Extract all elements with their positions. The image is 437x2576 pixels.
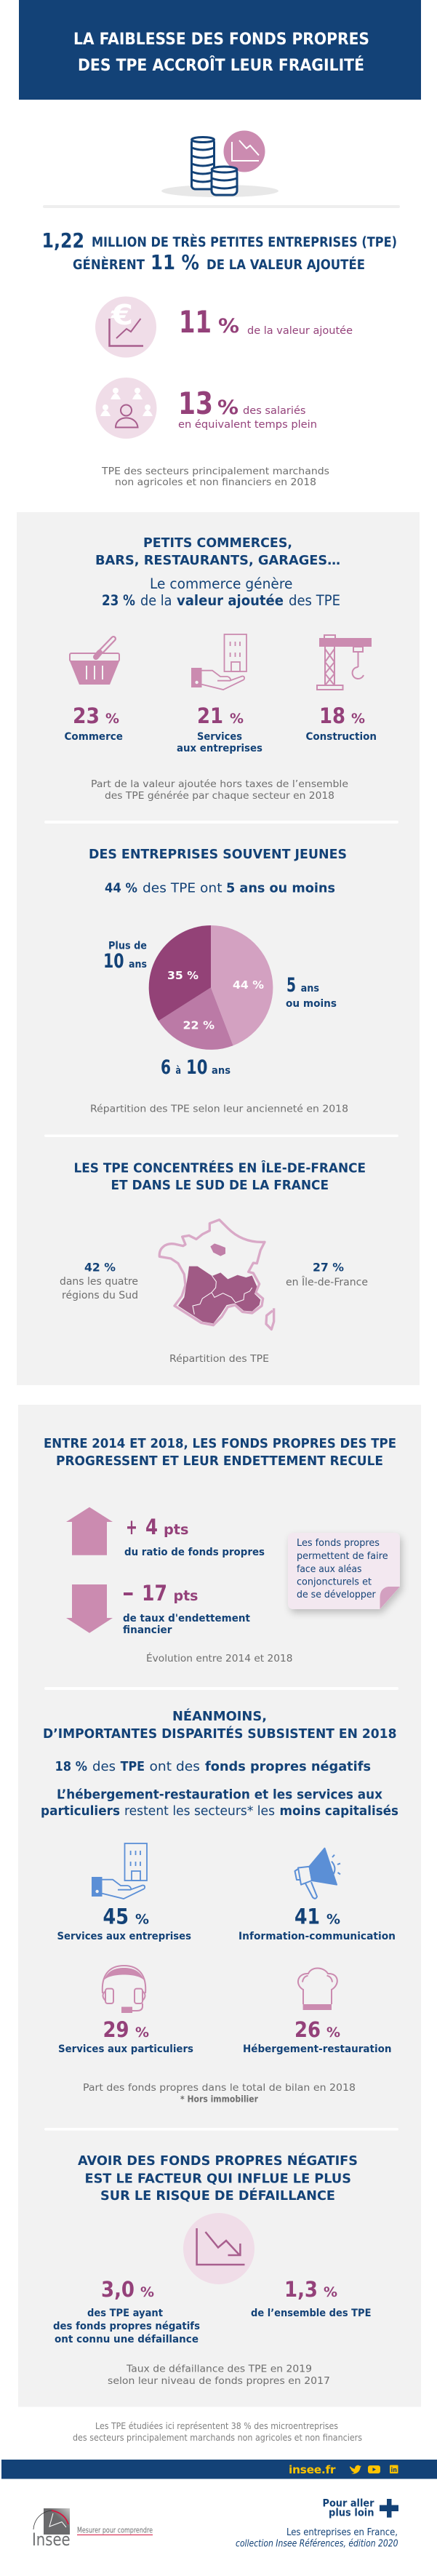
stat: accommodation and food 26 %: %	[326, 2025, 340, 2041]
stat: accommodation and food 26 %: 26	[294, 2017, 321, 2042]
stat: 3,0 %: des TPE ayant	[87, 2308, 163, 2319]
pie chart: company age: 22 %	[183, 1019, 215, 1032]
stat: sector shares	[73, 703, 365, 728]
stat: sector shares: %	[230, 711, 244, 727]
pie label: 5 years or less: 5	[286, 974, 296, 997]
text: 18 percent negative equity: fonds propres négatifs	[205, 1759, 371, 1774]
text: commerce share: de la	[140, 592, 172, 609]
stat: sector shares: 18	[319, 703, 345, 728]
pie chart: company age: 35 %	[167, 969, 199, 982]
heading: young businesses: DES ENTREPRISES SOUVENT JEUNES	[89, 847, 347, 862]
stat: +4 pts: pts	[164, 1521, 189, 1538]
heading: disparities	[43, 1708, 397, 1742]
stat: +4 pts: 4	[145, 1515, 158, 1539]
pie label: 5 years or less: ans	[301, 983, 319, 994]
icon: euro growth chart: €	[111, 299, 133, 331]
heading: 2014-2018 trend	[44, 1436, 396, 1469]
pie label: 6 to 10 years: ans	[212, 1065, 230, 1077]
caption: equity share: Part des fonds propres dans le total de bilan en 2018	[83, 2082, 356, 2094]
heading: 2014-2018 trend: ENTRE 2014 ET 2018, LES FONDS PROPRES DES TPE	[44, 1436, 396, 1451]
further reading: collection Insee Références, édition 2020	[236, 2539, 398, 2550]
stat: services to individuals 29 %: %	[135, 2025, 149, 2041]
callout: note on equity	[288, 1533, 400, 1609]
stat: services to individuals 29 %	[58, 2017, 193, 2055]
pie label: 6 to 10 years	[161, 1056, 230, 1079]
stat: -17 pts: 17	[142, 1581, 167, 1606]
stat: sector shares: %	[351, 711, 365, 727]
stat: 1,3 %: de l’ensemble des TPE	[251, 2308, 371, 2319]
text: 44 percent: 44 %	[105, 882, 137, 896]
stat: -17 pts	[123, 1581, 250, 1636]
icon: megaphone	[295, 1849, 340, 1899]
stat: 11 % value added	[179, 304, 353, 340]
stat: services to business 45 %: Services aux entreprises	[57, 1931, 191, 1942]
heading: failure risk: AVOIR DES FONDS PROPRES NÉGATIFS	[78, 2153, 358, 2169]
text: 44 percent	[105, 882, 335, 896]
stat: accommodation and food 26 %: Hébergement-restauration	[243, 2043, 391, 2055]
icon: basket	[70, 639, 119, 685]
caption: evolution: Évolution entre 2014 et 2018	[146, 1652, 292, 1664]
footnote	[73, 2421, 362, 2443]
stat: 1,3 %	[251, 2277, 371, 2319]
heading: key figures: DE LA VALEUR AJOUTÉE	[207, 257, 365, 273]
heading: failure risk: SUR LE RISQUE DE DÉFAILLANCE	[100, 2188, 335, 2204]
stat: services to business 45 %: 45	[103, 1905, 129, 1929]
further reading	[236, 2498, 398, 2550]
stat: +4 pts: du ratio de fonds propres	[124, 1547, 265, 1558]
title: DES TPE ACCROÎT LEUR FRAGILITÉ	[78, 55, 364, 75]
stat: south 42 %	[60, 1261, 138, 1301]
heading: small businesses: PETITS COMMERCES,	[143, 535, 292, 551]
stat: 13 % employees: des salariés	[243, 405, 305, 417]
stat: sector shares: 21	[197, 703, 223, 728]
heading: 2014-2018 trend: PROGRESSENT ET LEUR ENDETTEMENT RECULE	[56, 1454, 383, 1469]
heading: regions: ET DANS LE SUD DE LA FRANCE	[111, 1178, 329, 1193]
labels: sectors: Construction	[305, 731, 377, 743]
stat: Île-de-France 27 %: 27 %	[313, 1261, 344, 1275]
text: least capitalised sectors: moins capitalisés	[279, 1803, 398, 1819]
labels: sectors: aux entreprises	[177, 743, 262, 754]
text: 18 percent negative equity: TPE	[121, 1759, 145, 1774]
text: commerce share: 23 %	[102, 592, 135, 609]
logo: Insee	[32, 2508, 153, 2550]
stat: services to individuals 29 %: 29	[103, 2017, 129, 2042]
stat: 1,3 %: 1,3	[284, 2277, 318, 2302]
text: commerce share: Le commerce génère	[150, 575, 292, 592]
logo: Insee: Insee	[32, 2529, 71, 2550]
labels: sectors	[64, 731, 377, 754]
stat: information-communication 41 %: %	[326, 1912, 340, 1928]
stat: 3,0 %: ont connu une défaillance	[55, 2334, 199, 2345]
stat: south 42 %: 42 %	[84, 1261, 116, 1275]
stat: -17 pts: financier	[123, 1624, 172, 1636]
stat: +4 pts: +	[126, 1515, 137, 1539]
further reading: plus loin	[329, 2508, 374, 2519]
stat: Île-de-France 27 %: en Île-de-France	[286, 1275, 368, 1288]
caption: failure rate: selon leur niveau de fonds propres en 2017	[108, 2375, 330, 2387]
further reading: Les entreprises en France,	[286, 2527, 398, 2538]
text: least capitalised sectors: restent les secteurs* les	[124, 1803, 275, 1819]
pie label: 6 to 10 years: 6	[161, 1056, 171, 1079]
caption: failure rate: Taux de défaillance des TPE en 2019	[126, 2364, 312, 2375]
stat: +4 pts	[124, 1515, 265, 1558]
stat: 3,0 %: des fonds propres négatifs	[53, 2321, 200, 2332]
stat: sector shares: %	[105, 711, 119, 727]
heading: key figures: MILLION DE TRÈS PETITES ENTREPRISES (TPE)	[92, 234, 397, 250]
further reading: Pour aller	[323, 2498, 374, 2510]
caption: regions: Répartition des TPE	[169, 1353, 269, 1365]
heading: disparities: D’IMPORTANTES DISPARITÉS SUBSISTENT EN 2018	[43, 1726, 397, 1742]
text: least capitalised sectors: L’hébergement-restauration et les services aux	[57, 1787, 382, 1803]
stat: sector shares: 23	[73, 703, 100, 728]
icon: headset	[103, 1966, 145, 2013]
icon: plus	[380, 2499, 398, 2518]
text: 18 percent negative equity: des	[92, 1759, 116, 1774]
stat: information-communication 41 %: 41	[294, 1905, 320, 1929]
labels: sectors: Commerce	[64, 731, 123, 743]
heading: regions: LES TPE CONCENTRÉES EN ÎLE-DE-FRANCE	[74, 1160, 366, 1176]
caption: scope: TPE des secteurs principalement marchands	[101, 466, 329, 477]
icon: chef hat	[298, 1969, 337, 2010]
footnote: des secteurs principalement marchands non agricoles et non financiers	[73, 2433, 362, 2443]
heading: small businesses	[95, 535, 340, 568]
logo: Insee: Mesurer pour comprendre	[77, 2526, 153, 2535]
icon: building on hand, blue	[92, 1843, 147, 1899]
pie chart: company age	[149, 925, 273, 1050]
pie label: 5 years or less: ou moins	[286, 998, 337, 1010]
pie label: 6 to 10 years: à	[176, 1065, 181, 1077]
stat: 3,0 %	[53, 2277, 200, 2345]
pie label: 6 to 10 years: 10	[186, 1056, 208, 1079]
stat: information-communication 41 %	[238, 1905, 396, 1942]
caption: equity share	[83, 2082, 356, 2105]
stat: 3,0 %: 3,0	[101, 2277, 135, 2302]
stat: 13 % employees: %	[217, 396, 238, 419]
text: commerce share	[102, 575, 340, 609]
pie label: over 10 years: 10	[103, 950, 124, 973]
icon: linkedin	[390, 2465, 398, 2474]
heading: small businesses: BARS, RESTAURANTS, GARAGES…	[95, 553, 340, 568]
stat: accommodation and food 26 %	[243, 2017, 391, 2055]
callout: note on equity: Les fonds propres	[297, 1537, 380, 1549]
stat: 11 % value added: %	[218, 315, 239, 338]
callout: note on equity: conjoncturels et	[297, 1576, 372, 1587]
pie label: over 10 years	[103, 941, 147, 973]
caption: age: Répartition des TPE selon leur ancienneté en 2018	[90, 1103, 348, 1114]
pie label: over 10 years: Plus de	[108, 941, 147, 952]
stat: 11 % value added: de la valeur ajoutée	[247, 325, 353, 337]
caption: sector shares: Part de la valeur ajoutée hors taxes de l’ensemble	[91, 778, 348, 790]
text: 18 percent negative equity: ont des	[150, 1759, 200, 1774]
stat: -17 pts: de taux d'endettement	[123, 1613, 250, 1624]
stat: services to business 45 %	[57, 1905, 191, 1942]
stat: services to business 45 %: %	[135, 1912, 149, 1928]
stat: 13 % employees: 13	[178, 386, 213, 421]
text: commerce share: des TPE	[289, 592, 340, 609]
stat: 11 % value added: 11	[179, 304, 212, 340]
pie chart: company age: 44 %	[233, 978, 264, 992]
pie label: 5 years or less	[286, 974, 337, 1010]
caption: scope: non agricoles et non financiers en 2018	[115, 476, 316, 488]
icon: building on hand	[191, 634, 246, 690]
pie label: over 10 years: ans	[129, 959, 147, 970]
stat: services to individuals 29 %: Services aux particuliers	[58, 2043, 193, 2055]
callout: note on equity: de se développer	[297, 1589, 376, 1600]
icon: youtube	[368, 2465, 380, 2473]
stat: -17 pts: pts	[173, 1587, 198, 1604]
caption: sector shares: des TPE générée par chaque secteur en 2018	[105, 790, 334, 802]
text: least capitalised sectors: particuliers	[41, 1803, 120, 1819]
stat: 13 % employees: en équivalent temps plein	[178, 419, 317, 431]
map: France	[159, 1220, 274, 1329]
heading: key figures: 1,22	[42, 228, 84, 252]
header banner	[19, 0, 421, 100]
heading: failure risk	[78, 2153, 358, 2204]
title	[73, 30, 369, 75]
stat: Île-de-France 27 %	[286, 1261, 368, 1288]
icon: coin stacks with falling chart	[161, 131, 278, 197]
text: commerce share: valeur ajoutée	[177, 592, 284, 609]
icon: linkedin: in	[391, 2467, 397, 2474]
caption: scope	[101, 466, 329, 488]
stat: 13 % employees	[178, 386, 317, 431]
icon: crane	[317, 635, 372, 690]
heading: failure risk: EST LE FACTEUR QUI INFLUE LE PLUS	[84, 2171, 351, 2186]
callout: note on equity: permettent de faire	[297, 1550, 388, 1562]
stat: 3,0 %: %	[140, 2284, 154, 2300]
stat: south 42 %: régions du Sud	[62, 1290, 138, 1301]
caption: failure rate	[108, 2364, 330, 2387]
caption: equity share: * Hors immobilier	[180, 2094, 258, 2105]
text: 44 percent: 5 ans ou moins	[226, 882, 335, 896]
text: 44 percent: des TPE ont	[143, 882, 222, 896]
icon: twitter	[350, 2465, 361, 2474]
icon: employees	[96, 378, 157, 439]
footer band: insee.fr	[289, 2463, 336, 2476]
stat: information-communication 41 %: Information-communication	[238, 1931, 396, 1942]
heading: key figures	[42, 228, 397, 274]
text: least capitalised sectors	[41, 1787, 398, 1819]
footer band	[1, 2460, 437, 2479]
stat: south 42 %: dans les quatre	[60, 1276, 138, 1288]
text: 18 percent negative equity: 18 %	[55, 1759, 87, 1774]
heading: regions	[74, 1160, 366, 1193]
heading: key figures: 11 %	[151, 250, 199, 274]
labels: sectors: Services	[197, 731, 242, 743]
arrow: up	[66, 1507, 113, 1555]
icon: falling chart	[183, 2213, 254, 2284]
caption: sector shares	[91, 778, 348, 802]
heading: key figures: GÉNÈRENT	[73, 257, 145, 273]
heading: disparities: NÉANMOINS,	[172, 1708, 267, 1724]
arrow: down	[66, 1584, 113, 1633]
callout: note on equity: face aux aléas	[297, 1563, 362, 1575]
text: 18 percent negative equity	[55, 1759, 371, 1774]
stat: 1,3 %: %	[324, 2284, 337, 2300]
icon: euro growth chart	[95, 297, 156, 358]
footnote: Les TPE étudiées ici représentent 38 % des microentreprises	[95, 2421, 338, 2431]
panel: sectors, age and regions	[17, 512, 420, 1385]
title: LA FAIBLESSE DES FONDS PROPRES	[73, 30, 369, 49]
panel: equity, disparities and failure	[18, 1405, 421, 2406]
